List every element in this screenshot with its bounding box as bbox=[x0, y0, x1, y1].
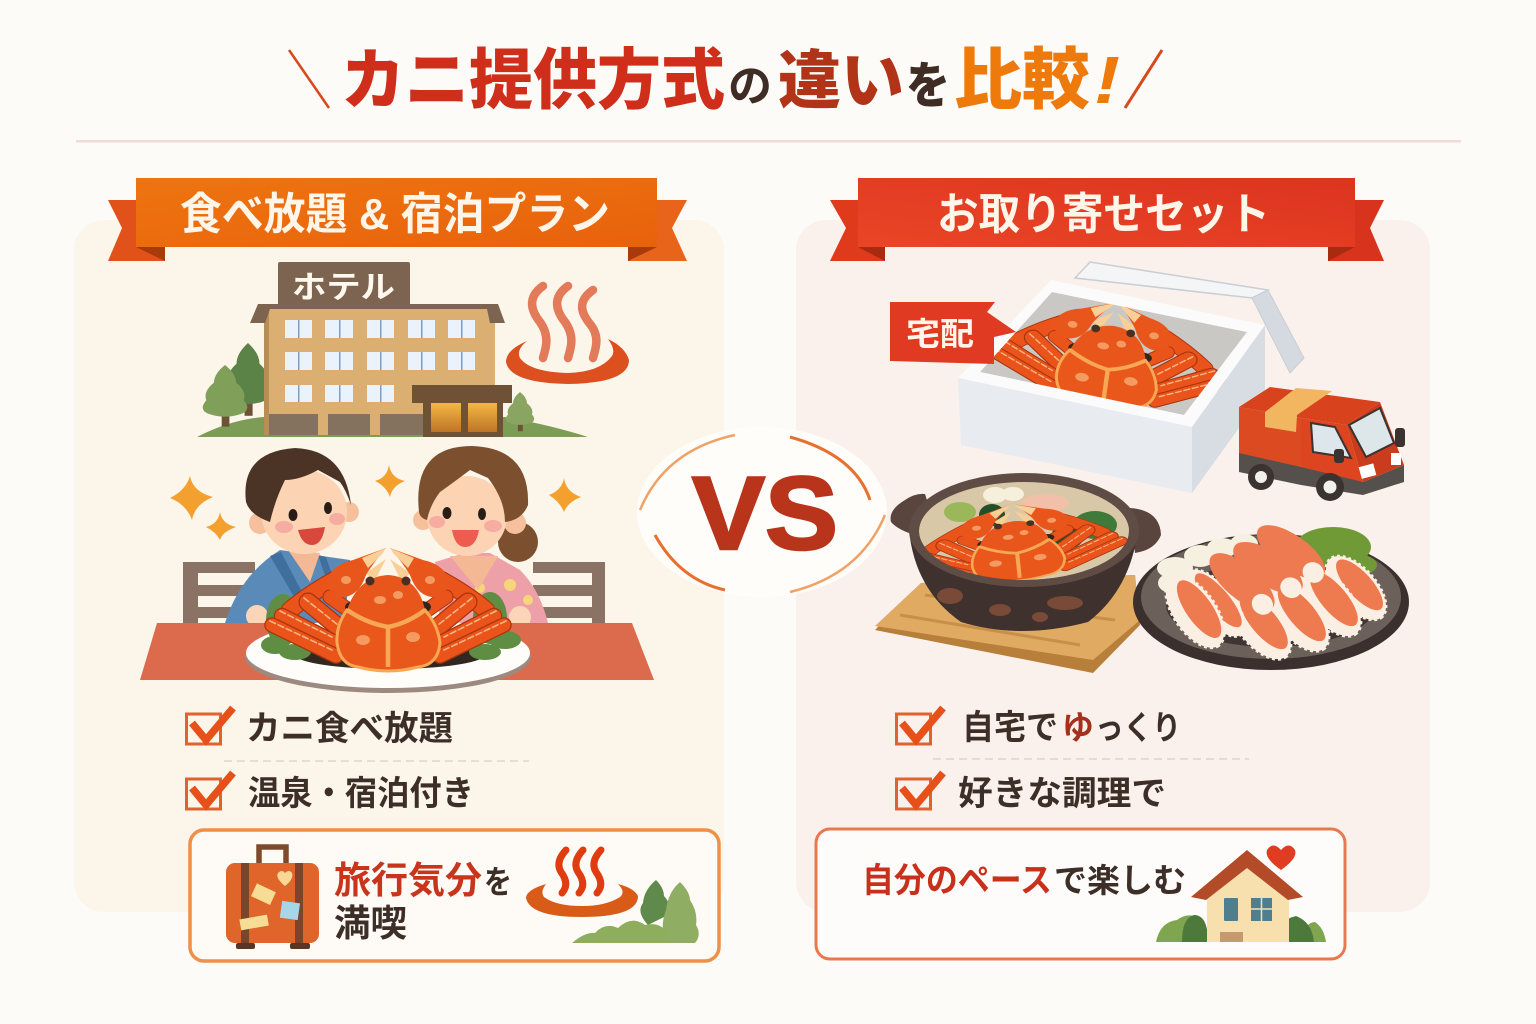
check item: favorite cooking: 好きな調理で bbox=[958, 775, 1166, 813]
title: ! bbox=[1094, 43, 1120, 118]
illustration: styrofoam box with crab bbox=[958, 262, 1304, 493]
illustration: hotel bbox=[197, 262, 588, 437]
icon: house with heart bbox=[1156, 846, 1326, 942]
check item: hot spring and stay: 温泉・宿泊付き bbox=[248, 775, 474, 813]
title: を bbox=[906, 58, 950, 114]
illustration: hotel: ホテル bbox=[292, 270, 395, 305]
title: の bbox=[728, 62, 772, 111]
callout: travel mood: を bbox=[484, 864, 512, 900]
icon: hot spring small bbox=[526, 850, 638, 917]
checklist: buffet and stay bbox=[186, 708, 529, 813]
illustration: cutting board bbox=[875, 575, 1140, 673]
title: 比較 bbox=[954, 43, 1090, 118]
illustration: girl bbox=[413, 446, 548, 628]
illustration: crab legs plate bbox=[1133, 515, 1409, 670]
icon: hot spring bbox=[506, 286, 629, 384]
banner: home delivery bbox=[830, 178, 1384, 261]
callout: travel mood: 満喫 bbox=[334, 903, 407, 944]
callout: travel mood bbox=[190, 830, 719, 961]
check item: crab buffet: カニ食べ放題 bbox=[246, 710, 453, 748]
check item: relax at home: 自宅で bbox=[962, 709, 1058, 747]
illustration: bushes bbox=[572, 880, 699, 943]
checklist: home delivery bbox=[896, 708, 1249, 813]
tag: delivery bbox=[890, 302, 1016, 364]
tag: delivery: 宅配 bbox=[906, 316, 974, 352]
icon: delivery truck bbox=[1239, 387, 1405, 501]
callout: own pace: 自分のペース bbox=[862, 862, 1052, 900]
title bbox=[289, 43, 1162, 118]
icon: suitcase bbox=[226, 847, 319, 949]
illustration: boy bbox=[225, 448, 359, 627]
callout: travel mood: 旅行気分 bbox=[334, 860, 482, 901]
callout: own pace bbox=[816, 829, 1345, 959]
banner: buffet and stay bbox=[108, 178, 687, 261]
banner: buffet and stay: 食べ放題 & 宿泊プラン bbox=[180, 190, 610, 239]
VS badge bbox=[637, 427, 887, 597]
icon: sparkles bbox=[170, 465, 581, 540]
callout: own pace: で楽しむ bbox=[1054, 862, 1186, 899]
VS badge: VS bbox=[692, 456, 838, 572]
check item: relax at home: ゆ bbox=[1062, 709, 1094, 746]
check item: relax at home bbox=[896, 708, 1181, 747]
panel: home delivery bbox=[796, 178, 1430, 959]
title: 違い bbox=[778, 45, 904, 117]
check item: relax at home: っくり bbox=[1095, 709, 1181, 746]
panel: buffet and stay bbox=[74, 178, 724, 961]
banner: home delivery: お取り寄せセット bbox=[937, 190, 1270, 239]
title: カニ提供方式 bbox=[341, 43, 725, 117]
illustration: chairs bbox=[183, 562, 605, 625]
illustration: crab hot pot bbox=[891, 473, 1161, 631]
illustration: table with crab platter bbox=[140, 548, 654, 693]
